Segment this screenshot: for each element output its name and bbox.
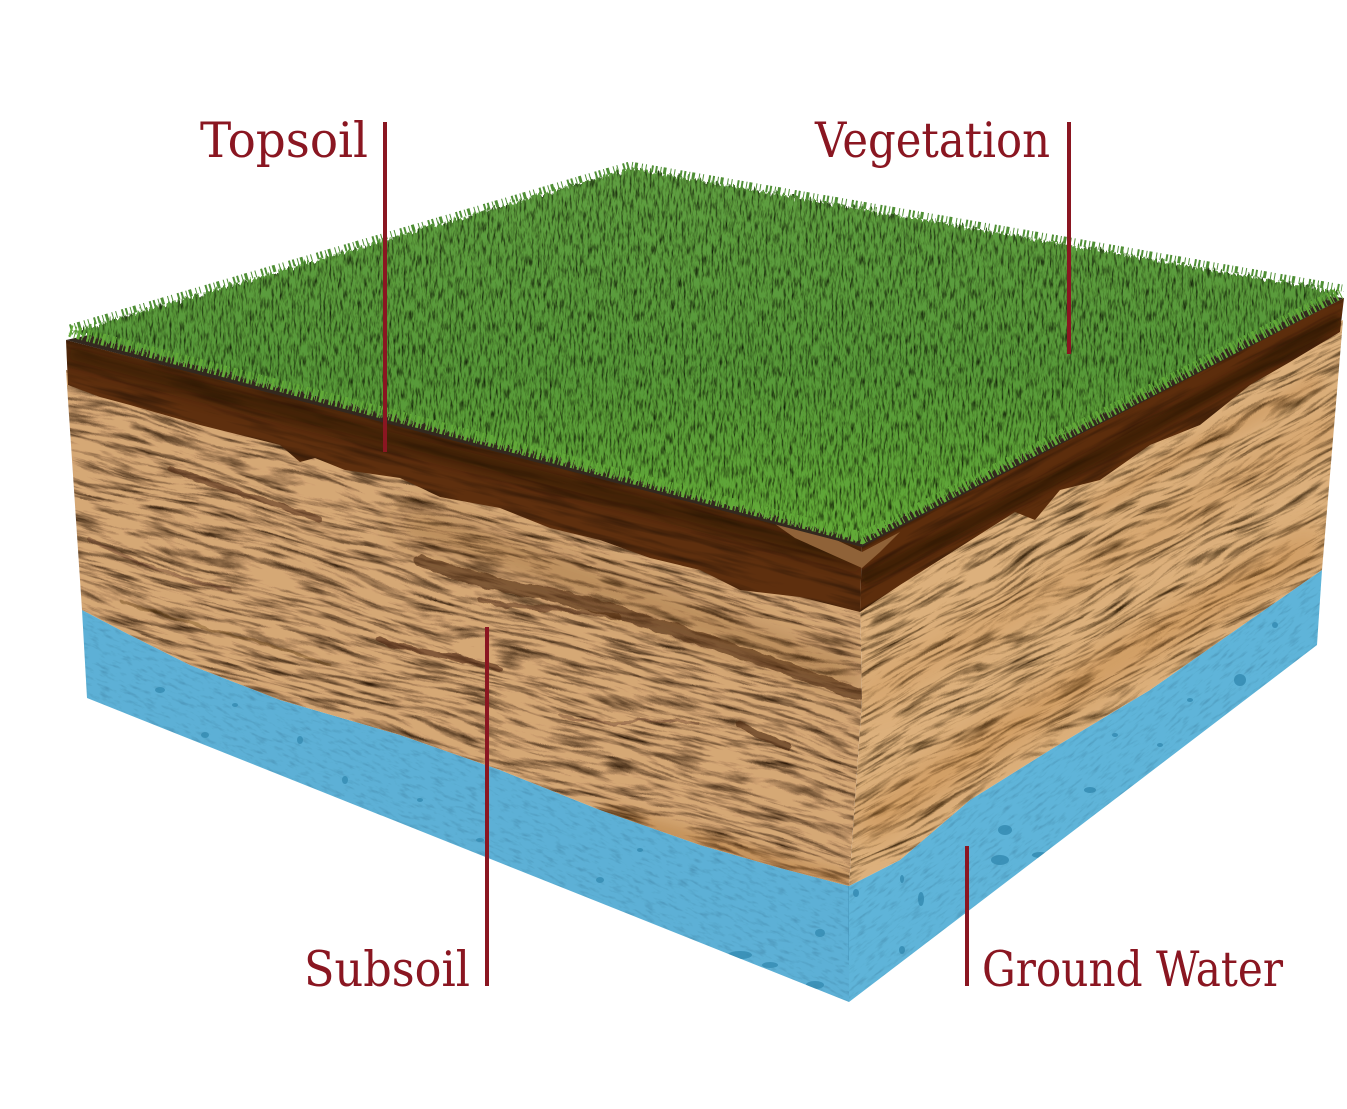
back edge blades bbox=[70, 165, 1342, 328]
label: Ground Water bbox=[965, 846, 1283, 998]
subsoil layer bbox=[60, 303, 1345, 916]
label: Vegetation bbox=[814, 112, 1071, 354]
label: Vegetation: Vegetation bbox=[814, 112, 1050, 169]
label: Topsoil: Topsoil bbox=[200, 112, 368, 169]
vegetation: grass surface bbox=[66, 165, 1344, 547]
exposed edge at front corner bbox=[775, 524, 900, 568]
label: Subsoil: Subsoil bbox=[304, 941, 470, 998]
label: Subsoil bbox=[304, 627, 489, 998]
soil block illustration bbox=[66, 162, 1344, 1002]
label: Topsoil bbox=[200, 112, 387, 452]
topsoil layer bbox=[66, 298, 1344, 612]
label: Ground Water: Ground Water bbox=[982, 941, 1283, 998]
ground water layer bbox=[82, 570, 1322, 1002]
